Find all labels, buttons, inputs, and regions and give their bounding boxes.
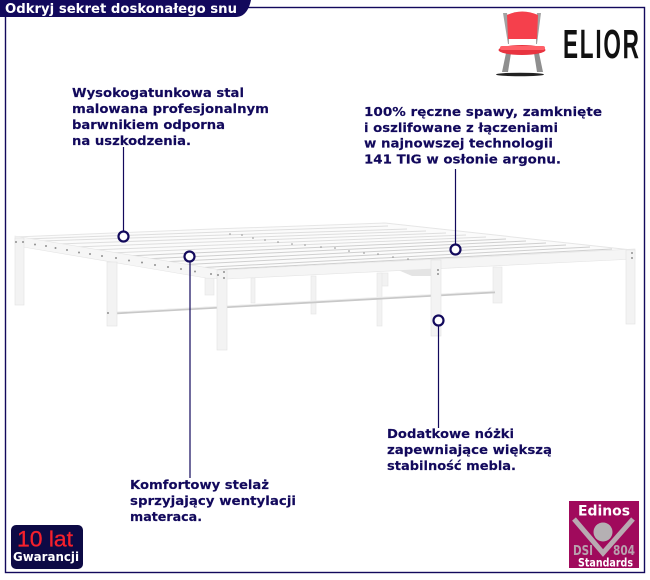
icon: red chair [496, 12, 546, 76]
text block: extra legs: Dodatkowe nóżki [387, 427, 514, 442]
text block: ventilated frame: materaca. [130, 510, 202, 525]
bed frame illustration [15, 223, 635, 350]
text block: extra legs: stabilność mebla. [387, 459, 516, 474]
badge: Edinos DSI 804 Standards [569, 501, 639, 570]
badge: Edinos DSI 804 Standards: DSI [573, 544, 593, 559]
text block: steel: Wysokogatunkowa stal [72, 86, 244, 101]
text block: welds: i oszlifowane z łączeniami [364, 121, 558, 136]
callout marker: steel [118, 147, 128, 242]
badge: 10 year warranty: Gwarancji [13, 550, 79, 564]
callout marker: welds [450, 169, 460, 254]
text block: extra legs [387, 427, 552, 474]
left side rail [15, 236, 227, 279]
slatted top [15, 223, 632, 272]
front rail [222, 249, 635, 279]
callout marker: frame [184, 252, 194, 478]
back legs [205, 267, 502, 326]
text block: steel [72, 86, 269, 149]
logo: Elior [496, 12, 641, 76]
text block: steel: malowana profesjonalnym [72, 102, 269, 117]
callout marker: extra legs [434, 316, 444, 428]
text block: ventilated frame [130, 478, 296, 525]
text block: welds: 100% ręczne spawy, zamknięte [364, 105, 602, 120]
text block: welds [364, 105, 602, 168]
text block: ventilated frame: sprzyjający wentylacji [130, 494, 296, 509]
badge: Edinos DSI 804 Standards: Edinos [578, 504, 630, 520]
wordmark: ELIOR [563, 22, 641, 68]
title: Odkryj sekret doskonałego snu [5, 2, 237, 17]
badge: Edinos DSI 804 Standards: Standards [578, 556, 633, 570]
text block: steel: na uszkodzenia. [72, 134, 191, 149]
badge: Edinos DSI 804 Standards: 804 [613, 544, 635, 559]
rail bolts [15, 233, 633, 314]
text block: welds: 141 TIG w osłonie argonu. [364, 152, 561, 168]
text block: extra legs: zapewniające większą [387, 443, 552, 458]
centre support rod [117, 292, 495, 313]
badge: 10 year warranty: 10 lat [17, 526, 73, 552]
text block: steel: barwnikiem odporna [72, 118, 225, 133]
text block: welds: w najnowszej technologii [364, 136, 553, 152]
text block: ventilated frame: Komfortowy stelaż [130, 478, 269, 493]
callout lines and markers [118, 147, 460, 478]
front legs [15, 238, 635, 350]
centre beam under slats [398, 268, 432, 276]
badge: 10 year warranty [11, 525, 83, 569]
